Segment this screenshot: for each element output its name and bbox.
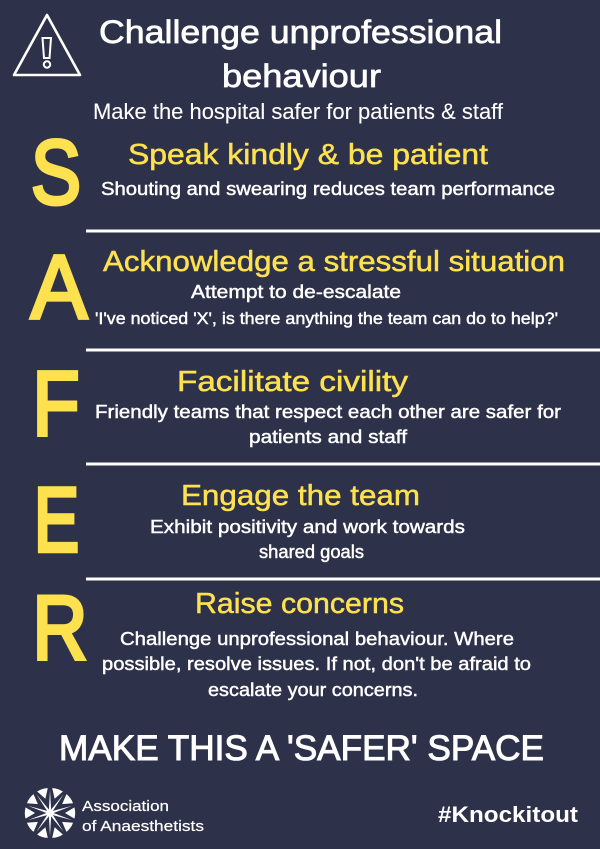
heading: facilitate: Facilitate civility: [177, 366, 409, 398]
panel: E - engage: [34, 470, 465, 571]
title: behaviour: [222, 58, 381, 94]
title: Challenge unprofessional: [99, 14, 502, 50]
letter E: E: [34, 470, 79, 571]
text: challenge: Challenge unprofessional behaviour. Where: [120, 628, 514, 649]
subtitle: Make the hospital safer for patients & staff: [93, 99, 504, 124]
hashtag: #Knockitout: [438, 802, 579, 827]
letter F: F: [32, 354, 80, 455]
text: friendly teams: Friendly teams that respect each other are safer for: [95, 401, 561, 422]
heading: engage: Engage the team: [181, 480, 420, 512]
text: challenge: [102, 628, 531, 700]
text: exhibit positivity: [150, 516, 465, 562]
icon: warning triangle: [14, 15, 80, 75]
text: challenge: possible, resolve issues. If not, don't be afraid to: [102, 653, 531, 674]
text: quote: 'I've noticed 'X', is there anything the team can do to help?': [95, 309, 558, 328]
text: attempt: Attempt to de-escalate: [191, 281, 401, 302]
call to action: MAKE THIS A 'SAFER' SPACE: [59, 729, 544, 768]
heading: raise concerns: Raise concerns: [195, 588, 404, 620]
text: exhibit positivity: shared goals: [259, 541, 364, 562]
logo text: of Anaesthetists: [82, 818, 204, 835]
title: [99, 14, 502, 94]
panel: A - acknowledge: [30, 238, 565, 338]
text: friendly teams: patients and staff: [249, 426, 408, 447]
panel: F - facilitate: [32, 354, 561, 455]
logo text: Association: [82, 798, 169, 815]
letter R: R: [32, 578, 88, 679]
text: challenge: escalate your concerns.: [208, 679, 418, 700]
divider lines: [86, 230, 600, 580]
text: friendly teams: [95, 401, 561, 447]
panel: R - raise concerns: [32, 578, 531, 700]
heading: speak kindly: Speak kindly & be patient: [128, 139, 488, 171]
letter S: S: [31, 122, 81, 224]
logo text: [82, 798, 204, 835]
text: shouting: Shouting and swearing reduces team performance: [101, 178, 555, 199]
panel: S - speak kindly: [31, 122, 555, 224]
heading: acknowledge: Acknowledge a stressful situation: [103, 246, 565, 278]
text: exhibit positivity: Exhibit positivity and work towards: [150, 516, 465, 537]
letter A: A: [30, 238, 88, 338]
logo: Association of Anaesthetists: [25, 787, 204, 839]
icon: logo star: [25, 787, 75, 839]
